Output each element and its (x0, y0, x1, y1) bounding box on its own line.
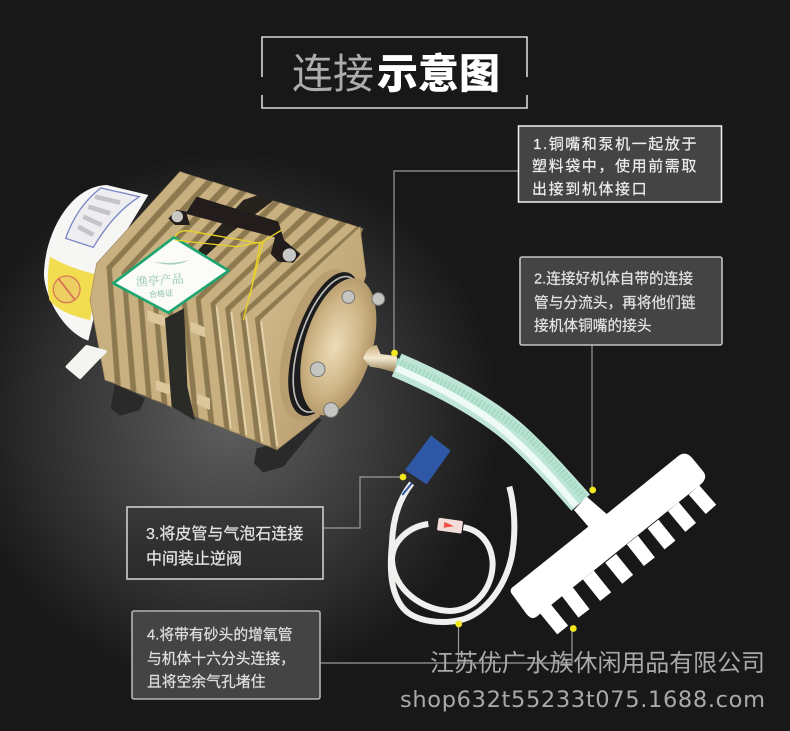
cylinder rods (147, 310, 210, 410)
title light part: 连接 (292, 51, 374, 97)
callout 4: 与机体十六分头连接， (147, 650, 295, 668)
callout 2: 管与分流头，再将他们链 (534, 294, 696, 312)
watermark: 江苏优广水族休闲用品有限公司 (430, 650, 765, 677)
black strap (165, 308, 195, 421)
callout 1 (518, 126, 722, 202)
check valve (437, 518, 463, 534)
yellow string (175, 230, 282, 320)
title bold part: 示意图 (377, 40, 500, 100)
tag (113, 237, 229, 313)
hose and manifold (391, 362, 711, 630)
pump feet (111, 383, 322, 473)
callout 3: 中间装止逆阀 (146, 550, 242, 568)
callout 1: 出接到机体接口 (532, 181, 648, 198)
tube fitting (402, 483, 412, 495)
pump core (90, 172, 363, 450)
callout 3 (127, 507, 323, 579)
air outlet (67, 347, 105, 377)
callout 4: 且将空余气孔堵住 (147, 672, 266, 690)
air stone (405, 435, 451, 484)
callout 3: 3.将皮管与气泡石连接 (146, 525, 303, 543)
callout 2: 接机体铜嘴的接头 (534, 318, 652, 334)
air tube (391, 483, 514, 622)
carry handle (168, 195, 301, 263)
callout 4 (132, 611, 320, 699)
end plate (265, 261, 390, 429)
watermark: shop632t55233t075.1688.com (400, 687, 765, 713)
manifold outlets (545, 490, 711, 630)
motor label (66, 188, 139, 247)
air pump (44, 172, 401, 473)
watermark (400, 650, 765, 713)
screws (310, 291, 385, 417)
tag: 合格证 (149, 288, 173, 299)
tag: 渔亭产品 (135, 270, 184, 290)
manifold (511, 454, 711, 630)
callout 1: 1.铜嘴和泵机一起放于 (533, 136, 698, 153)
callout 2 (520, 257, 722, 345)
green hose (397, 362, 585, 506)
callout 1: 塑料袋中，使用前需取 (532, 158, 698, 175)
callout dots (391, 350, 596, 632)
warning sticker (48, 257, 98, 320)
title frame (262, 37, 527, 108)
fin highlights (217, 307, 277, 447)
motor housing (44, 185, 148, 341)
brass nozzle (363, 345, 401, 374)
cooling fins (90, 172, 366, 450)
connector lines (320, 171, 592, 663)
callout 2: 2.连接好机体自带的连接 (534, 270, 693, 288)
callout 4: 4.将带有砂头的增氧管 (147, 626, 293, 644)
